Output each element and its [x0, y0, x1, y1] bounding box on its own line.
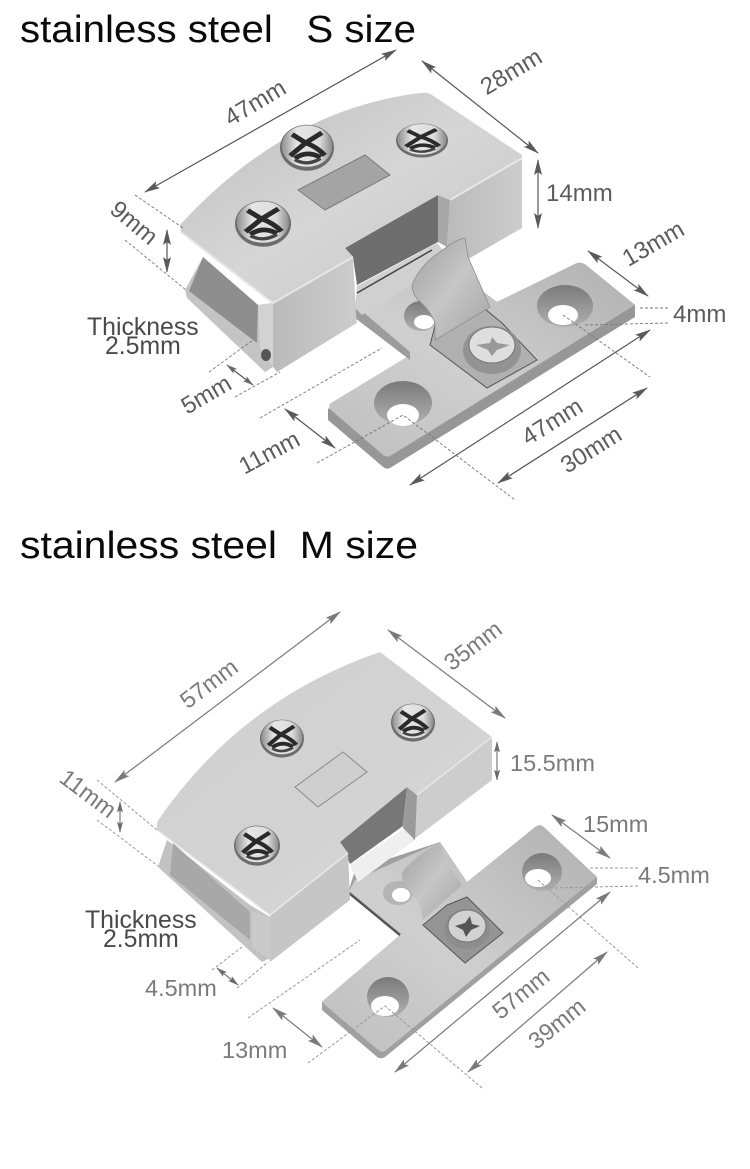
lower jaw	[158, 840, 270, 962]
label: 9mm: 9mm	[105, 196, 163, 251]
body right side	[447, 158, 522, 262]
label: 11mm: 11mm	[234, 426, 304, 480]
label: 5mm: 5mm	[177, 370, 236, 420]
panel: S size hinge	[180, 93, 635, 469]
label: 47mm lower: 47mm	[517, 393, 588, 451]
label: 15mm: 15mm	[583, 811, 648, 837]
label: 57mm lower: 57mm	[487, 963, 554, 1024]
top face	[180, 93, 522, 303]
label: thickness: 2.5mm	[105, 333, 181, 360]
label: thickness: Thickness	[85, 907, 197, 934]
title: S size: stainless steel S size	[20, 9, 416, 51]
bracket and mounting plate	[322, 825, 597, 1058]
label: 15.5mm: 15.5mm	[510, 750, 595, 776]
label: 35mm: 35mm	[439, 616, 507, 676]
title: M size: stainless steel M size	[20, 525, 418, 567]
dimension lines: M size	[97, 612, 638, 1088]
label: 4.5mm right: 4.5mm	[638, 862, 710, 888]
rectangular slot	[295, 752, 367, 807]
notch	[340, 787, 407, 864]
rectangular slot	[298, 155, 390, 210]
label: 4mm: 4mm	[673, 301, 726, 328]
label: 57mm top: 57mm	[175, 654, 243, 714]
top face	[157, 652, 492, 915]
label: 4.5mm left: 4.5mm	[145, 975, 217, 1001]
countersunk hole left	[367, 977, 409, 1017]
label: 14mm: 14mm	[546, 180, 613, 207]
label: 47mm top: 47mm	[220, 74, 291, 132]
bracket and mounting plate	[328, 243, 635, 469]
label: 13mm: 13mm	[222, 1037, 287, 1063]
countersunk hole right	[537, 285, 593, 327]
spring clip	[412, 238, 537, 388]
label: 30mm: 30mm	[556, 421, 627, 479]
body front side	[270, 853, 350, 962]
lower jaw	[185, 257, 273, 372]
upturned strip	[355, 243, 445, 315]
label: 11mm: 11mm	[55, 764, 121, 823]
label: 28mm: 28mm	[476, 43, 547, 101]
panel: M size hinge	[157, 652, 597, 1058]
countersunk hole right	[522, 853, 562, 891]
label: 13mm: 13mm	[618, 216, 689, 272]
screws	[234, 704, 435, 866]
screws	[235, 124, 448, 247]
bright strip	[350, 828, 415, 882]
body right side	[413, 737, 492, 840]
notch	[345, 195, 438, 285]
label: thickness: Thickness	[87, 314, 199, 341]
spring clip	[402, 842, 503, 963]
label: 39mm: 39mm	[523, 993, 590, 1054]
dimension lines: S size	[125, 50, 668, 500]
countersunk hole left	[374, 381, 432, 425]
body front side	[273, 257, 357, 372]
label: thickness: 2.5mm	[103, 926, 179, 953]
